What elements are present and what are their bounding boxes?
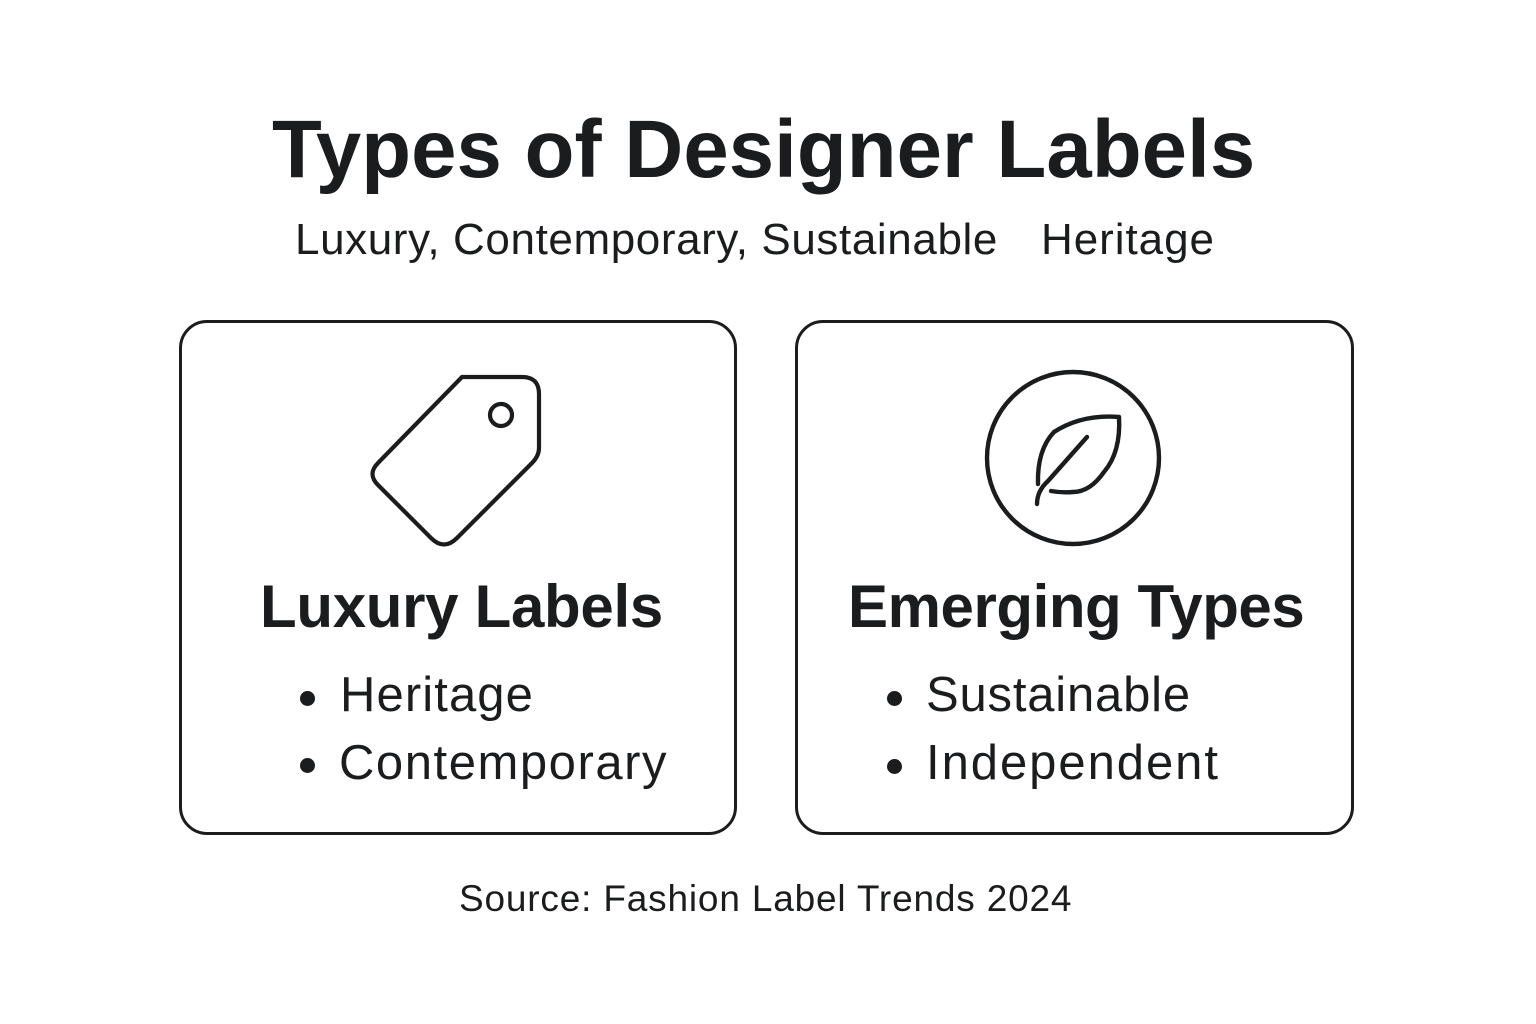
bullet dot 2	[300, 758, 315, 773]
icon: price tag	[370, 374, 542, 547]
bullet: heritage: Heritage	[340, 668, 534, 722]
title: Types of Designer Labels	[272, 104, 1255, 195]
heading: luxury labels: Luxury Labels	[260, 573, 663, 640]
bullet dot 1	[300, 691, 315, 706]
heading: emerging types: Emerging Types	[848, 573, 1304, 640]
panel: luxury labels	[179, 320, 737, 835]
bullet: independent: Independent	[926, 736, 1220, 790]
bullet: contemporary: Contemporary	[339, 736, 668, 790]
subtitle: heritage: Heritage	[1041, 215, 1215, 264]
panel: emerging types	[795, 320, 1354, 835]
bullet dot 2	[887, 759, 902, 774]
source: Source: Fashion Label Trends 2024	[459, 878, 1072, 919]
bullet dot 1	[887, 691, 902, 706]
subtitle: Luxury, Contemporary, Sustainable	[295, 215, 998, 264]
icon: leaf in circle	[984, 370, 1162, 546]
list: emerging types	[887, 668, 1220, 790]
list: luxury labels	[300, 668, 668, 790]
bullet: sustainable: Sustainable	[926, 668, 1191, 722]
